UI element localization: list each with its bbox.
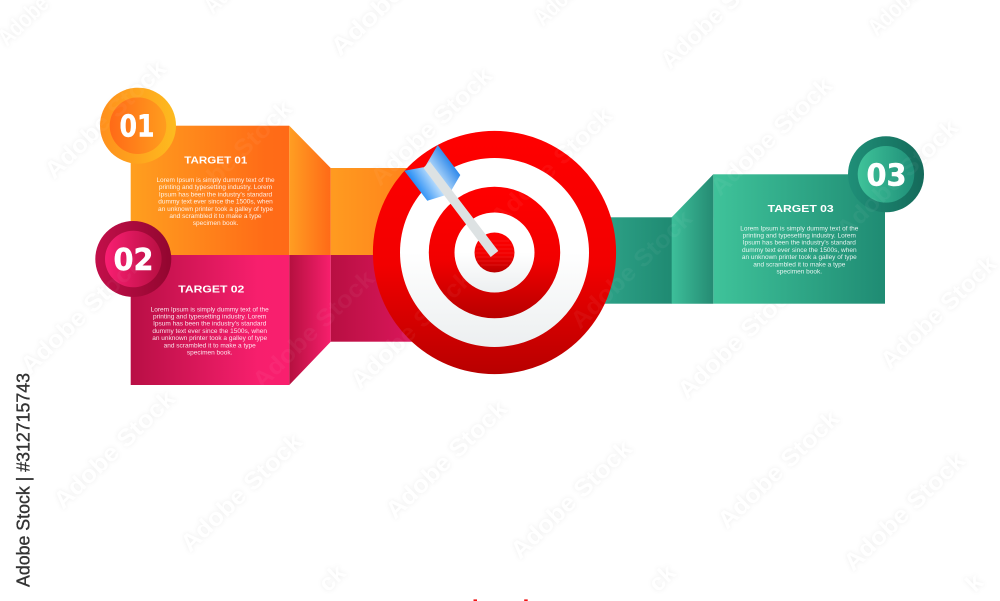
watermark overlay on coloured areas: Adobe Stock [705,72,838,201]
panel fold: target 03 [672,174,713,304]
connector strip: orange [331,168,421,255]
stock credit: Adobe Stock | #312715743 [14,373,34,587]
text block: target 03: Lorem Ipsum is simply dummy text of the [740,225,859,232]
watermark overlay on coloured areas: Adobe Stock [247,265,380,394]
text block: target 03: printing and typesetting industry. Lorem [743,232,856,240]
heading: target 03: TARGET 03 [768,203,834,215]
text block: target 03: Ipsum has been the industry's standard [743,240,856,247]
number badge 02: 02 [114,243,154,278]
text block: target 01 [156,177,275,227]
text block: target 02: specimen book. [187,350,233,356]
text block: target 02 [151,306,269,356]
watermark overlay on coloured areas: Adobe Stock [365,62,498,191]
watermark pattern: Adobe Stock [485,102,618,231]
panel: target 01 [131,126,331,255]
watermark pattern: Adobe Stock [672,275,805,404]
panel: target 03 [672,174,885,304]
panel fold: target 02 [289,255,331,385]
text block: target 02: Ipsum has been the industry's standard [153,321,267,328]
watermark overlay on coloured areas: Adobe Stock [345,265,478,394]
text block: target 02: an unknown printer took a galley of type [152,335,268,342]
watermark pattern: Adobe Stock [165,95,298,224]
text block: target 02: Lorem Ipsum is simply dummy text of the [151,306,269,313]
number badge 03 [848,136,924,212]
heading: target 01: TARGET 01 [184,154,247,166]
panel face: target 01 [131,126,289,255]
cropped red marks at bottom edge [474,599,528,601]
text block: target 01: dummy text ever since the 1500s, when [158,199,273,206]
watermark overlay on coloured areas: Adobe Stock [831,114,964,243]
text block: target 03: specimen book. [777,268,822,276]
connector strip: teal [590,217,672,304]
watermark pattern: Adobe Stock [345,265,478,394]
watermark pattern: k [960,568,989,597]
watermark pattern: Adobe Stock [838,447,971,576]
text block: target 01: and scrambled it to make a type [169,213,262,220]
watermark pattern: ck [313,559,352,597]
watermark pattern: Adobe Stock [39,55,172,184]
text block: target 02: dummy text ever since the 1500s, when [152,328,267,335]
text block: target 01: printing and typesetting industry. Lorem [159,184,272,191]
panel face: target 03 [713,174,885,304]
icon: bullseye target [373,131,616,374]
text block: target 03: dummy text ever since the 1500s, when [742,247,857,254]
watermark overlay on coloured areas: Adobe Stock [15,250,148,379]
panel: target 02 [131,255,331,385]
watermark pattern: Adobe Stock [175,428,308,557]
text block: target 03 [740,225,859,276]
number badge 02 [95,221,171,297]
watermark overlay on coloured areas: Adobe Stock [565,205,698,334]
watermark pattern: ck [643,559,682,597]
text block: target 02: printing and typesetting industry. Lorem [153,314,266,320]
watermark pattern: Adobe Stock [365,62,498,191]
icon: dart [404,145,498,257]
text block: target 01: Lorem Ipsum is simply dummy text of the [156,177,275,184]
text block: target 01: Ipsum has been the industry's standard [159,191,273,198]
text block: target 01: specimen book. [193,220,238,227]
watermark pattern: Adobe Stock [380,395,513,524]
number badge 01 [100,88,176,164]
heading: target 02: TARGET 02 [178,284,244,296]
text block: target 01: an unknown printer took a galley of type [158,206,273,213]
panel fold: target 01 [289,126,331,255]
watermark pattern: Adobe Stock [831,114,964,243]
text block: target 03: an unknown printer took a galley of type [742,254,857,261]
text block: target 02: and scrambled it to make a type [164,342,256,349]
watermark overlay on coloured areas: Adobe Stock [165,95,298,224]
watermark pattern: Adobe Stock [705,72,838,201]
connector strip: crimson [331,255,426,342]
watermark pattern: Adobe Stock [712,405,845,534]
number badge 03: 03 [866,158,906,193]
watermark overlay on coloured areas: Adobe Stock [485,102,618,231]
watermark overlay on coloured areas [15,55,964,394]
watermark pattern: Adobe Stock [48,385,181,514]
watermark pattern: Adobe Stock [15,250,148,379]
number badge 01: 01 [120,110,154,145]
watermark pattern: Adobe Stock [505,435,638,564]
text block: target 03: and scrambled it to make a type [753,261,846,268]
watermark overlay on coloured areas: Adobe Stock [39,55,172,184]
watermark pattern: Adobe Stock [875,250,1000,374]
panel face: target 02 [131,255,289,385]
